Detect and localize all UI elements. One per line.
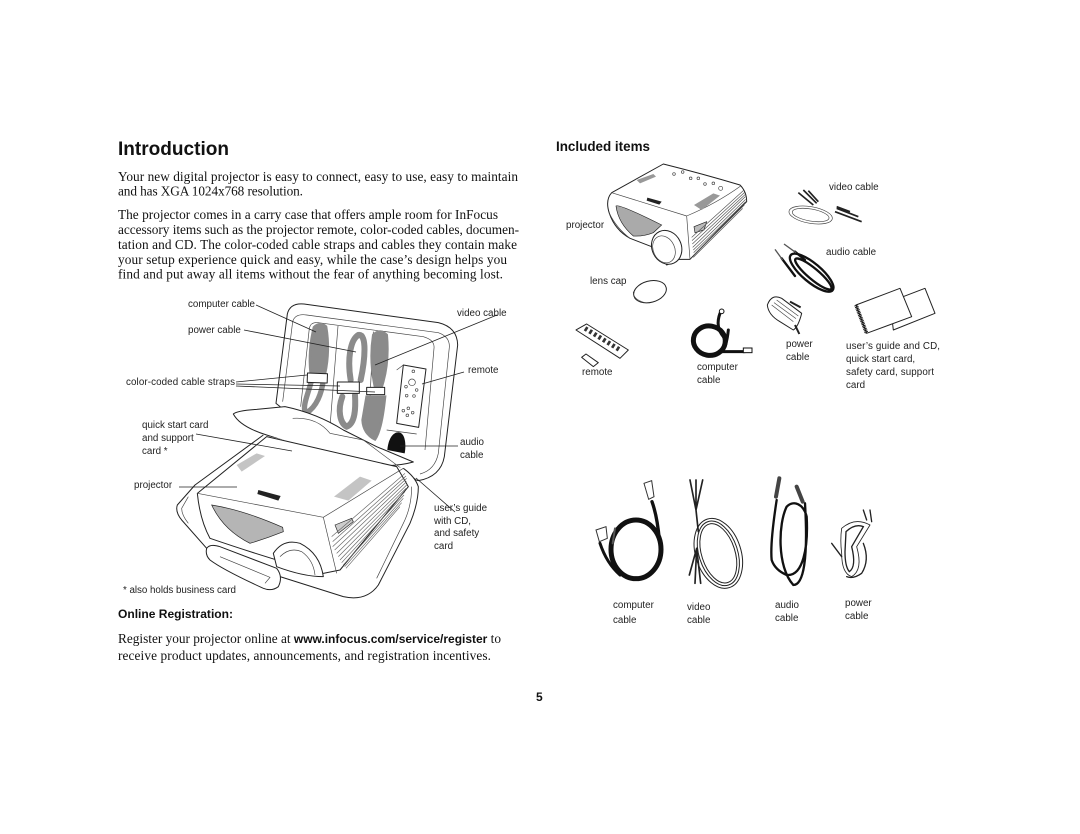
case labels: projector	[134, 480, 173, 491]
flap	[233, 407, 413, 466]
lens cap	[631, 277, 669, 306]
registration paragraph: Register your projector online at www.infocus.com/service/register to	[118, 631, 501, 646]
computer cable	[691, 309, 752, 358]
audio plugs	[775, 244, 796, 260]
large video cable	[686, 480, 751, 595]
included items labels: lens cap	[590, 276, 627, 287]
cable row labels: cable	[613, 615, 637, 626]
handle	[206, 545, 280, 590]
included items labels	[566, 182, 940, 391]
cable row labels: cable	[845, 611, 869, 622]
clip below flap	[273, 440, 292, 455]
included items labels: user’s guide and CD,	[846, 341, 940, 352]
carry case paragraph: accessory items such as the projector remote, color-coded cables, documen-	[118, 222, 519, 237]
user guide and cards	[856, 288, 935, 333]
remote in lid	[397, 365, 426, 427]
included items labels: quick start card,	[846, 354, 915, 365]
title: Introduction	[118, 139, 229, 160]
large computer cable	[596, 481, 661, 579]
cable row labels: cable	[687, 615, 711, 626]
cable illustrations row	[596, 478, 872, 595]
large power cable	[832, 510, 872, 577]
projector	[197, 437, 408, 577]
intro paragraph	[118, 169, 518, 198]
case bottom	[177, 435, 418, 598]
case labels: card *	[142, 446, 168, 457]
video cable	[788, 190, 862, 227]
power cable	[767, 297, 802, 334]
projector	[608, 164, 747, 269]
case labels	[123, 299, 507, 596]
included items labels: card	[846, 380, 865, 391]
carry case illustration	[177, 304, 458, 598]
online registration heading: Online Registration:	[118, 609, 233, 621]
included items labels: power	[786, 339, 813, 350]
cable row labels: video	[687, 602, 711, 613]
cable row labels: cable	[775, 613, 799, 624]
included items illustrations	[576, 164, 935, 367]
case labels: audio	[460, 437, 485, 448]
included items labels: safety card, support	[846, 367, 934, 378]
case labels: with CD,	[433, 516, 471, 527]
case labels: computer cable	[188, 299, 256, 310]
carry case paragraph	[118, 207, 519, 282]
batteries	[582, 354, 598, 367]
cable row labels: computer	[613, 600, 655, 611]
case labels: color-coded cable straps	[126, 377, 235, 388]
intro paragraph: Your new digital projector is easy to connect, easy to use, easy to maintain	[118, 169, 518, 184]
case labels: * also holds business card	[123, 585, 236, 596]
cable straps	[307, 373, 385, 395]
case lid	[276, 304, 458, 481]
carry case paragraph: your setup experience quick and easy, while the case’s design helps you	[118, 252, 507, 267]
carry case paragraph: tation and CD. The color-coded cable straps and cables they contain make	[118, 237, 517, 252]
carry case paragraph: find and put away all items without the fear of anything becoming lost.	[118, 266, 503, 282]
included items labels: video cable	[829, 182, 879, 193]
case labels: and support	[142, 433, 194, 444]
included items labels: cable	[697, 375, 721, 386]
included items heading: Included items	[556, 139, 650, 154]
black audio cable	[387, 432, 405, 453]
remote	[576, 324, 628, 358]
carry case paragraph: The projector comes in a carry case that offers ample room for InFocus	[118, 207, 498, 222]
case labels: remote	[468, 365, 499, 376]
included items labels: computer	[697, 362, 739, 373]
gray cables in lid	[304, 324, 387, 439]
intro paragraph: and has XGA 1024x768 resolution.	[118, 184, 303, 198]
case labels: cable	[460, 450, 484, 461]
registration paragraph: receive product updates, announcements, and registration incentives.	[118, 648, 491, 663]
registration paragraph	[118, 631, 501, 663]
case labels: quick start card	[142, 420, 208, 431]
case labels: video cable	[457, 308, 507, 319]
large audio cable	[771, 478, 807, 585]
included items labels: cable	[786, 352, 810, 363]
case labels: power cable	[188, 325, 241, 336]
included items labels: remote	[582, 367, 613, 378]
case labels: card	[434, 541, 453, 552]
included items labels: audio cable	[826, 247, 877, 258]
included items labels: projector	[566, 220, 605, 231]
case labels: user’s guide	[434, 503, 488, 514]
audio cable	[782, 248, 839, 297]
case leader lines	[179, 305, 497, 512]
cable row labels	[613, 598, 872, 626]
cable row labels: power	[845, 598, 872, 609]
cable row labels: audio	[775, 600, 800, 611]
page number: 5	[536, 690, 543, 704]
case labels: and safety	[434, 528, 479, 539]
